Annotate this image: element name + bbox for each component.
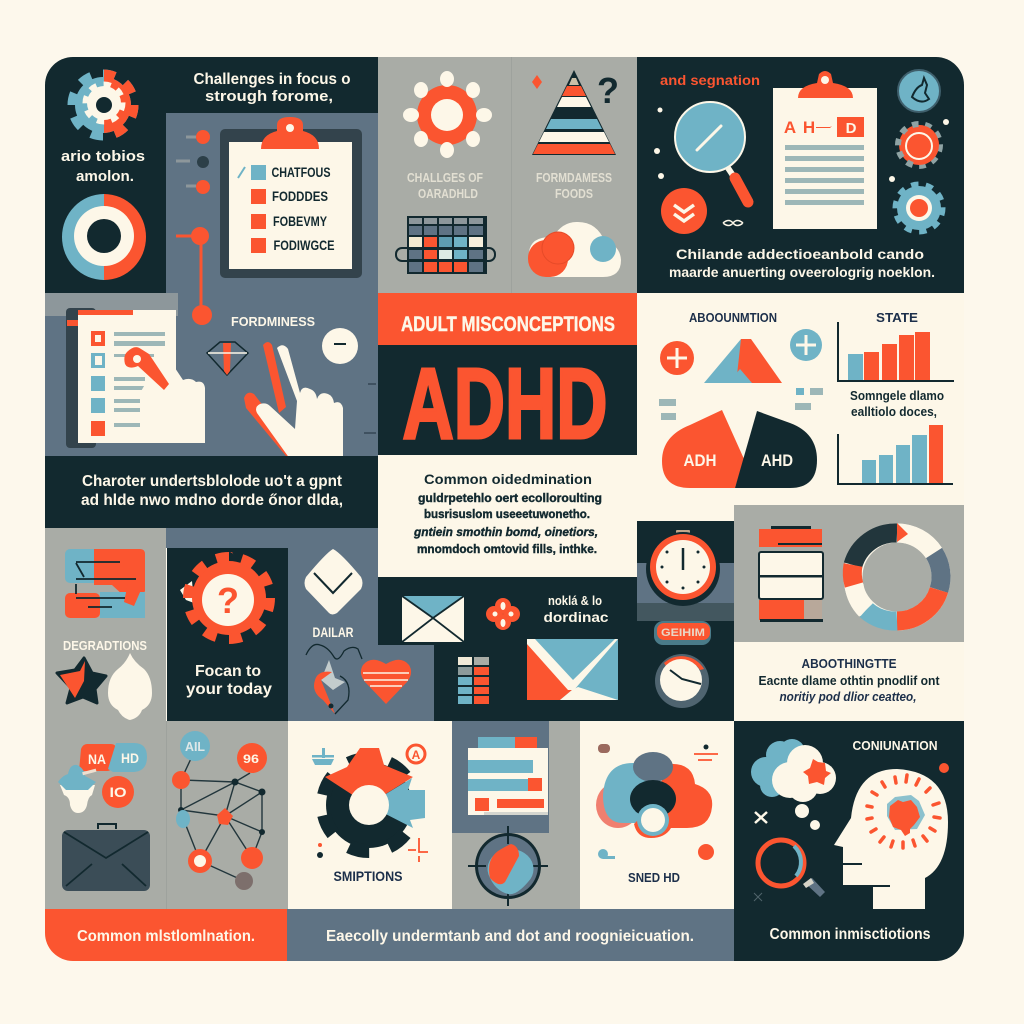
icon: crosshair target xyxy=(468,826,548,906)
panel: clipboard checklist: FOBEVMY xyxy=(273,213,328,229)
icon: star xyxy=(57,658,106,703)
icon: puzzle arrows xyxy=(65,549,145,618)
chart: split blob: AHD xyxy=(761,451,793,470)
chart: bars bottom xyxy=(838,425,953,484)
panel: gear symptoms xyxy=(288,721,452,909)
icon: red badge: A xyxy=(412,748,421,762)
text: diagnosis caption: maarde anuerting oveerologrig noeklon. xyxy=(669,264,935,280)
chart: donut xyxy=(62,194,146,280)
icon: pyramid xyxy=(532,70,616,155)
icon: diagnosis clipboard: D xyxy=(846,120,857,137)
text: gear caption: your today xyxy=(186,681,272,698)
icon: sun wheel xyxy=(403,71,492,158)
icon: cloud marks xyxy=(598,744,718,860)
panel: heading band xyxy=(166,57,378,113)
text: mail caption xyxy=(544,593,609,625)
icon: cloud xyxy=(528,222,621,277)
icon: magnifier ring xyxy=(754,840,825,901)
icon: thought cloud xyxy=(751,739,836,830)
icon: timeline dots xyxy=(176,130,212,325)
icon: orange dot xyxy=(939,763,949,773)
panel: common text: guldrpetehlo oert ecolloroulting xyxy=(418,491,602,505)
text: gray caption two xyxy=(536,173,612,198)
panel: ABOOT text xyxy=(734,642,964,721)
icon: envelope diamond xyxy=(304,549,362,614)
panel: bottom slate bar xyxy=(287,909,734,961)
icon: overlapping clouds xyxy=(596,752,712,838)
text: chart title: STATE xyxy=(876,310,918,325)
panel: doc and target xyxy=(452,721,580,909)
chart: split blob: ADH xyxy=(684,451,716,470)
chart: network graph: 96 xyxy=(243,752,259,766)
icon: blue gear xyxy=(896,185,942,231)
panel: clipboard checklist: CHATFOUS xyxy=(272,164,330,180)
panel: document and hands xyxy=(66,308,376,466)
panel: common text: mnomdoch omtovid fills, inthke. xyxy=(417,542,597,556)
panel: gray stack and donut xyxy=(734,505,964,642)
icon: red badge xyxy=(407,745,425,763)
panel: common text: Common oidedmination xyxy=(424,471,592,487)
icon: left hand pointing xyxy=(124,347,205,443)
panel: gray pyramid and cloud xyxy=(511,57,637,293)
panel: top right diagnosis xyxy=(630,57,964,293)
panel: right charts xyxy=(637,293,964,505)
panel: title xyxy=(378,293,637,460)
chart: split blob xyxy=(662,410,817,488)
text: cloud label: SNED HD xyxy=(628,870,680,885)
icon: round badge xyxy=(898,70,940,112)
icon: plus blue xyxy=(790,329,822,361)
text: gray caption two: FOODS xyxy=(555,186,593,201)
icon: flower xyxy=(486,598,520,630)
panel: heading band: Challenges in focus o xyxy=(194,71,351,88)
icon: chevron badge xyxy=(661,188,707,234)
icon: wall clock xyxy=(655,654,709,708)
text: conclusion footer: Common inmisctiotions xyxy=(770,926,931,943)
text: gray caption two: FORMDAMESS xyxy=(536,170,612,185)
panel: row three left xyxy=(45,528,166,721)
icon: cross xyxy=(755,812,767,823)
icon: stacked bars xyxy=(759,526,823,622)
icon: blue mushroom xyxy=(58,765,96,813)
panel: common text: busrisuslom useeetuwonetho. xyxy=(424,507,590,521)
text: diagnosis caption xyxy=(669,246,935,280)
icon: speech bubbles: NA xyxy=(88,751,106,767)
icon: plus orange xyxy=(660,341,694,375)
panel: common text xyxy=(414,474,602,555)
icon: striped heart xyxy=(361,660,411,704)
text: side caption: ario tobios xyxy=(61,148,145,165)
panel: row four gray xyxy=(45,721,288,909)
panel: ABOOT text: Eacnte dlame othtin pnodlif ont xyxy=(758,673,940,688)
panel: clocks xyxy=(637,505,734,721)
text: side caption xyxy=(62,150,144,181)
icon: small tool xyxy=(312,748,334,765)
text: chart caption xyxy=(850,388,944,419)
text: gray caption one: OARADHLD xyxy=(418,186,478,201)
text: mail caption: noklá & lo xyxy=(548,593,602,608)
panel: gear question xyxy=(166,528,288,721)
panel: clipboard checklist: FODDDES xyxy=(272,188,328,204)
text: chart caption: ealltiolo doces, xyxy=(851,404,937,419)
panel: clipboard checklist: FODIWGCE xyxy=(274,237,334,253)
panel: clipboard checklist xyxy=(220,117,362,278)
icon: orange gear question: ? xyxy=(217,580,239,621)
text: abbreviation heading: ABOOUNMTION xyxy=(689,310,777,325)
icon: large envelope xyxy=(527,639,618,700)
panel: bottom orange bar: Common mlstlomlnation. xyxy=(77,928,255,945)
icon: outline envelope xyxy=(402,596,464,642)
icon: orange gear xyxy=(898,124,940,166)
icon: gem xyxy=(207,342,248,375)
icon: star accent xyxy=(60,661,85,698)
icon: speech bubbles: HD xyxy=(121,750,139,766)
panel: slate heart column xyxy=(288,528,434,721)
text: gear caption: Focan to xyxy=(195,663,261,680)
text: side caption: amolon. xyxy=(76,168,134,185)
panel: heading band: strough forome, xyxy=(205,88,333,105)
heading: subtitle: ADULT MISCONCEPTIONS xyxy=(401,313,615,336)
icon: split triangle xyxy=(704,339,782,383)
panel: slate background xyxy=(45,113,378,456)
panel: mail navy xyxy=(378,577,637,721)
panel: gray sun and table xyxy=(378,57,512,293)
icon: grid tile xyxy=(458,657,489,704)
icon: calendar table xyxy=(396,216,495,274)
chart: bars top xyxy=(838,322,954,381)
text: daily label: DAILAR xyxy=(312,624,354,640)
icon: small dashes xyxy=(659,388,823,420)
panel: explanation band: ad hlde nwo mdno dorde őnor dlda, xyxy=(81,492,343,509)
icon: orange gear question xyxy=(180,557,270,639)
icon: magnifier xyxy=(675,102,748,202)
panel: explanation band xyxy=(45,456,378,528)
panel: ABOOT text: noritiy pod dlior ceatteo, xyxy=(780,689,916,704)
text: row label: DEGRADTIONS xyxy=(63,638,147,653)
panel: common text: gntiein smothin bomd, oinetiors, xyxy=(413,525,598,539)
icon: document bars xyxy=(468,737,548,815)
text: gray caption one xyxy=(408,173,483,198)
text: chart caption: Somngele dlamo xyxy=(850,388,944,403)
icon: head profile xyxy=(834,769,948,909)
icon: speech bubbles xyxy=(79,743,147,808)
text: gear caption xyxy=(186,663,272,698)
icon: right hand pointing xyxy=(244,342,343,466)
chart: network graph xyxy=(172,731,267,890)
panel: explanation band: Charoter undertsblolode uo't a gpnt xyxy=(82,473,343,490)
icon: segmented gear xyxy=(314,748,425,860)
icon: stopwatch xyxy=(646,530,720,606)
chart: donut segments xyxy=(852,523,941,621)
icon: briefcase envelope xyxy=(62,824,150,891)
icon: sparkles xyxy=(654,108,949,226)
panel: ABOOT text: ABOOTHINGTTE xyxy=(802,656,897,671)
text: conclusion heading: CONIUNATION xyxy=(852,738,938,753)
text: symptoms label: SMIPTIONS xyxy=(334,868,402,884)
heading: ADHD: ADHD xyxy=(402,348,608,460)
icon: diagnosis clipboard: H xyxy=(803,118,815,137)
panel: head conclusion xyxy=(734,721,964,961)
icon: label pill xyxy=(654,621,711,645)
panel: cloud head xyxy=(580,721,734,909)
panel: bottom orange bar xyxy=(45,909,287,961)
icon: diamond xyxy=(532,75,542,89)
text: diagnosis caption: Chilande addectioeanbold cando xyxy=(676,246,924,262)
icon: squiggle xyxy=(306,644,362,659)
icon: diagnosis clipboard xyxy=(773,71,877,229)
icon: question mark: ? xyxy=(597,70,619,111)
text: mini label: FORDMINESS xyxy=(231,314,315,329)
icon: broken heart xyxy=(314,660,349,714)
icon: diagnosis clipboard: A xyxy=(784,118,796,137)
icon: label pill: GEIHIM xyxy=(661,627,705,639)
text: red heading: and segnation xyxy=(660,72,760,88)
icon: gear xyxy=(72,74,134,136)
icon: document tablet xyxy=(66,308,176,448)
text: mail caption: dordinac xyxy=(544,609,609,625)
icon: small marks xyxy=(317,838,428,862)
icon: cream blob xyxy=(108,653,152,720)
icon: speech bubbles: IO xyxy=(110,784,127,800)
chart: network graph: AIL xyxy=(185,739,205,754)
panel: bottom slate bar: Eaecolly undermtanb and dot and roognieicuation. xyxy=(326,928,694,945)
icon: minus circle xyxy=(322,328,358,364)
text: gray caption one: CHALLGES OF xyxy=(407,170,483,185)
panel: top left icons xyxy=(45,57,166,293)
